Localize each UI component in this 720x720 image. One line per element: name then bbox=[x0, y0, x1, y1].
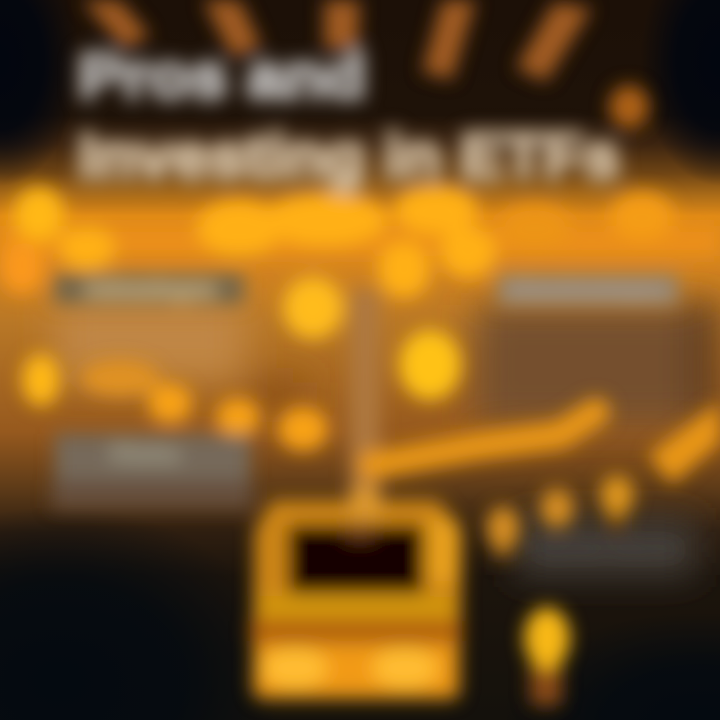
central yellow node upper bbox=[283, 277, 343, 339]
decorative streaks at top bbox=[82, 0, 592, 82]
small gold dots bbox=[486, 475, 634, 560]
machine gold band bbox=[260, 596, 454, 618]
title: Investing in ETFs bbox=[78, 120, 620, 192]
central yellow node lower bbox=[399, 330, 461, 400]
machine screen bbox=[288, 525, 424, 593]
icon: light bulb bbox=[524, 607, 570, 706]
panel heading: left: Advantages bbox=[85, 276, 215, 302]
rising line chart bbox=[372, 402, 720, 484]
panel heading: right: Disadvantages bbox=[510, 277, 666, 302]
left node chain bbox=[22, 354, 328, 451]
panel heading: lower left: Risks bbox=[110, 438, 180, 468]
small caption right: Market returns bbox=[539, 538, 677, 560]
icon: yellow machine bbox=[250, 488, 462, 700]
machine tray bbox=[260, 647, 452, 691]
machine stem bbox=[350, 488, 380, 520]
orange accent dot bbox=[609, 85, 649, 129]
panel heading: lower left bbox=[52, 434, 252, 508]
machine divider bbox=[250, 621, 462, 641]
title: Pros and bbox=[78, 40, 366, 112]
title bbox=[78, 40, 620, 192]
vertical connector bbox=[350, 290, 380, 505]
glowing band of nodes bbox=[0, 186, 720, 298]
panel heading: left bbox=[54, 274, 244, 304]
